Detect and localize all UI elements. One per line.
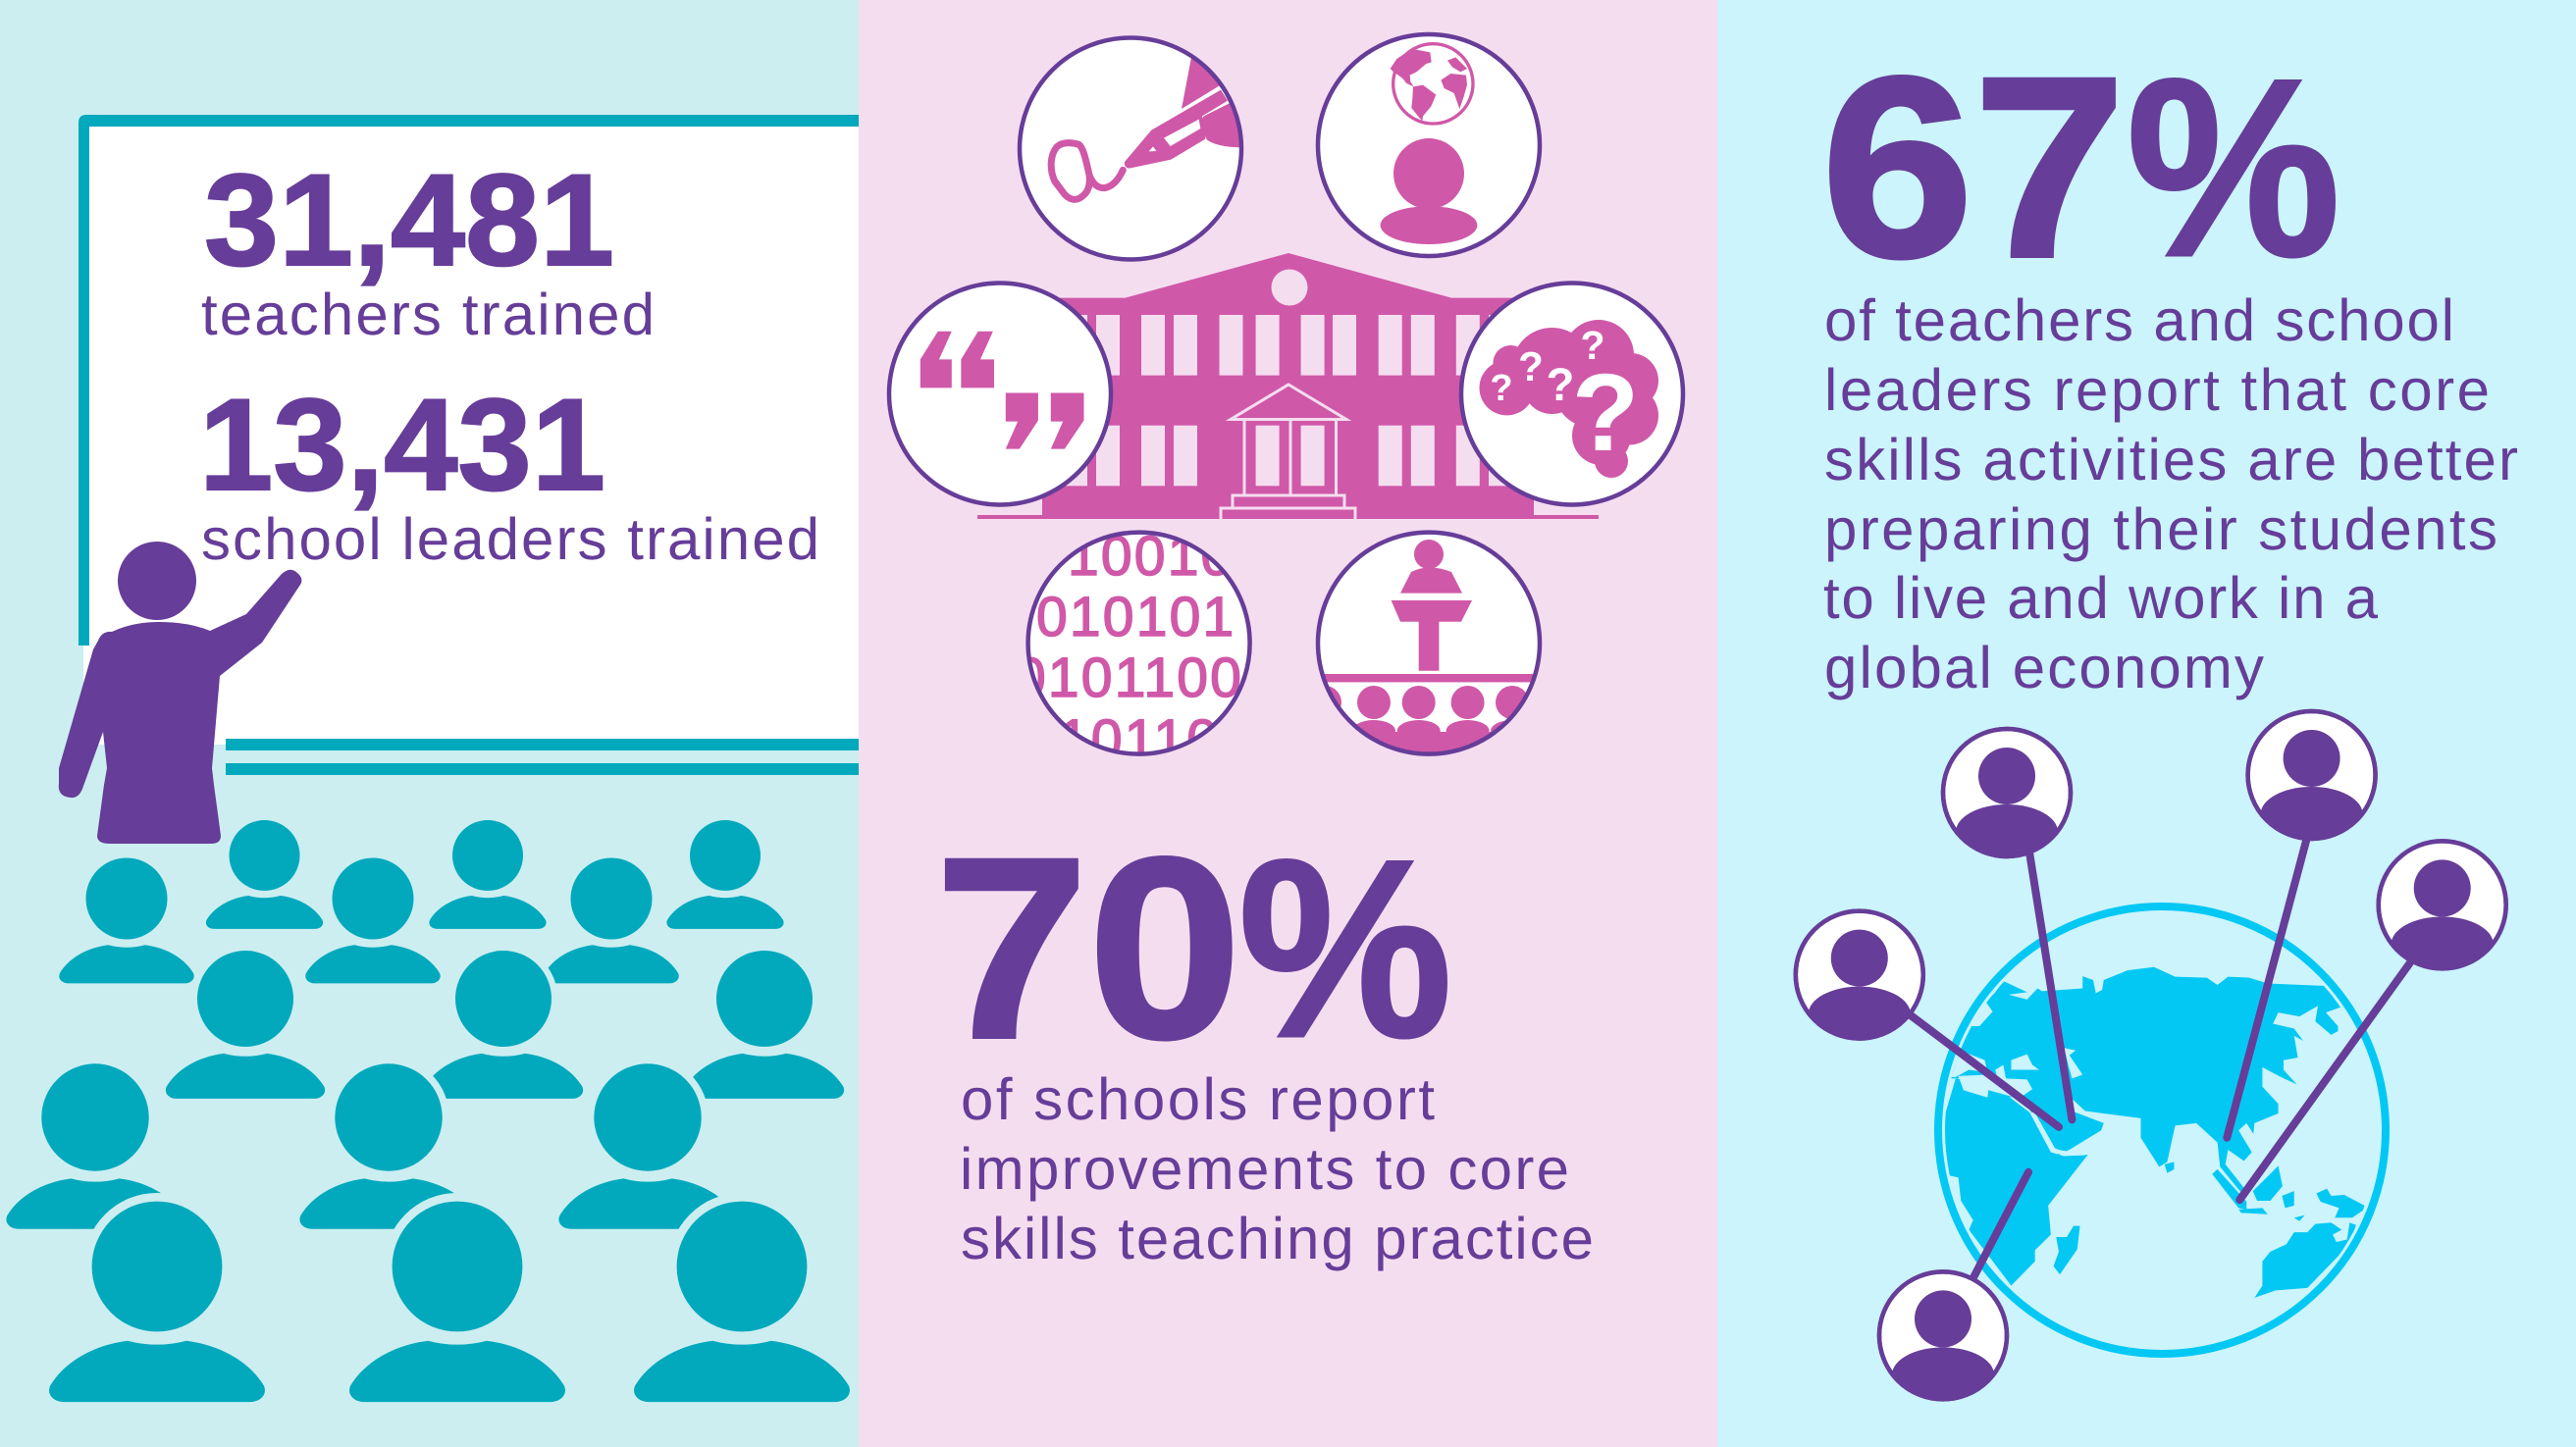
icon circle: binary code: 01011000 — [1015, 646, 1277, 709]
person bust — [1381, 138, 1477, 244]
67% description: preparing their students — [1824, 496, 2497, 562]
icon: world map globe — [1938, 906, 2386, 1354]
icon circle: speaker at podium with audience — [1303, 533, 1543, 761]
67% description: of teachers and school — [1824, 287, 2454, 353]
stat: 67% of teachers and school leaders: % — [2127, 26, 2340, 309]
icon circle: thought cloud with question marks: ? — [1518, 343, 1544, 389]
audience row 1 — [206, 815, 784, 929]
icon circle: binary code — [1025, 530, 1252, 756]
icon circle: globe above person — [1318, 34, 1540, 256]
audience row 4 — [6, 1057, 737, 1229]
stat: 31,481 teachers trained — [201, 148, 655, 347]
audience row 5 — [49, 1193, 850, 1402]
icon circle: thought cloud with question marks: ? — [1572, 351, 1639, 474]
stat: 13,431 school leaders trained — [199, 373, 819, 572]
70% description: skills teaching practice — [961, 1206, 1594, 1271]
icon circle: thought cloud with question marks: ? — [1490, 368, 1513, 409]
67% description: global economy — [1824, 635, 2264, 700]
icon circle: binary code: 010101 — [1036, 586, 1235, 648]
70% description: improvements to core — [960, 1136, 1569, 1202]
stat: 67% of teachers and school leaders — [1821, 24, 2518, 700]
67% description — [1823, 287, 2518, 700]
stat: 70% of schools — [935, 804, 1594, 1271]
67% description: to live and work in a — [1823, 565, 2379, 631]
icon circle: quotation marks — [889, 283, 1111, 504]
70% description — [960, 1066, 1594, 1271]
stat: 13,431 school leaders trained: 13,431 — [199, 373, 605, 518]
67% description: skills activities are better — [1824, 427, 2518, 492]
stat: 70% of schools: 70 — [935, 804, 1241, 1092]
icon circle: pen writing — [1020, 37, 1249, 259]
stat: 31,481 teachers trained: 31,481 — [204, 148, 614, 293]
icon: school building — [977, 253, 1599, 519]
icon: teacher pointing at board — [59, 542, 301, 844]
small globe — [1391, 44, 1473, 124]
70% description: of schools report — [961, 1066, 1435, 1132]
audience row 3 — [166, 945, 844, 1099]
panel: global economy background — [1717, 0, 2576, 1447]
stat: 13,431 school leaders trained: school leaders trained — [201, 506, 819, 572]
whiteboard — [79, 115, 859, 775]
icon circle: binary code: 101100 — [1058, 708, 1253, 771]
icon circle: thought cloud with question marks: ? — [1580, 323, 1605, 368]
icon: audience of students — [6, 815, 850, 1402]
icons: people around the globe — [1791, 711, 2511, 1404]
panel: teachers trained background — [0, 0, 859, 1447]
67% description: leaders report that core — [1824, 357, 2490, 423]
stat: 31,481 teachers trained: teachers trained — [201, 282, 655, 347]
icon circle: thought cloud with question marks: ? — [1547, 358, 1574, 410]
icon circle: binary code: 10010 — [1068, 525, 1235, 588]
stat: 70% of schools: % — [1238, 806, 1452, 1090]
arrows: connector lines from people to globe — [1911, 841, 2410, 1278]
icon circle: thought cloud with question marks — [1461, 283, 1683, 504]
panel: schools background — [859, 0, 1717, 1447]
audience row 2 — [59, 853, 679, 983]
stat: 67% of teachers and school leaders: 67 — [1821, 24, 2126, 311]
